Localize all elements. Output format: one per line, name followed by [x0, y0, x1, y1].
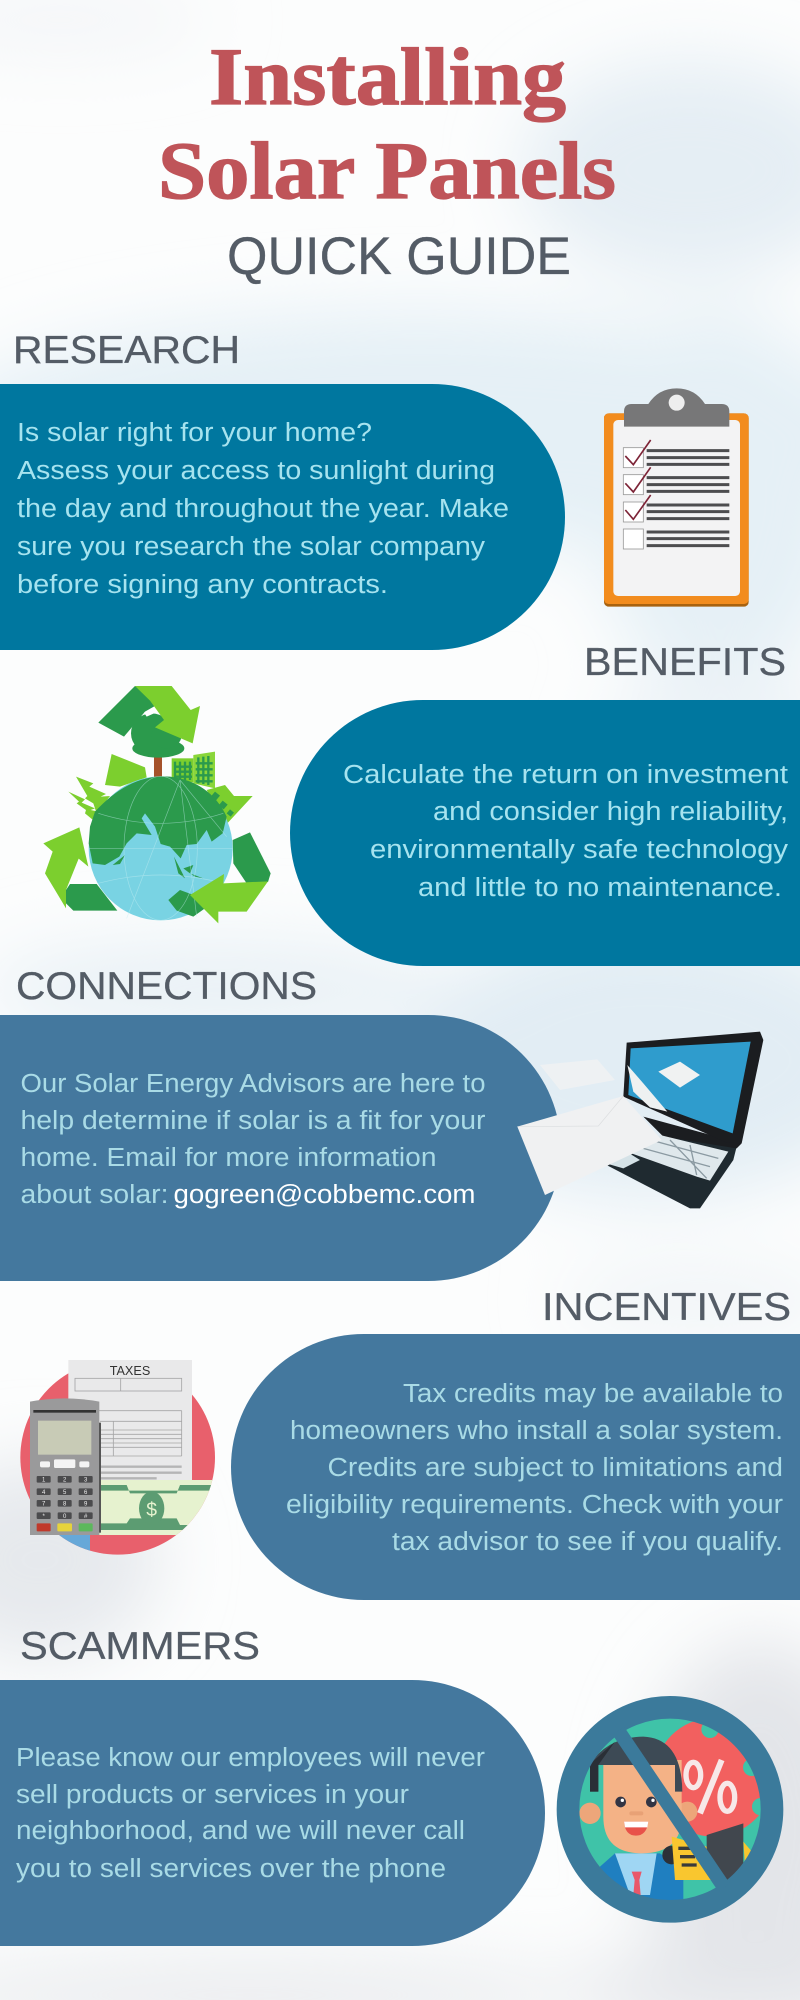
- card reader: 4: [42, 1490, 46, 1496]
- card reader: 0: [63, 1514, 67, 1520]
- tax form: TAXES: [110, 1364, 150, 1378]
- connections text: help determine if solar is a fit for your: [20, 1107, 486, 1135]
- panel: incentives: [231, 1334, 800, 1600]
- card reader: 9: [84, 1502, 88, 1508]
- incentives text: eligibility requirements. Check with your: [286, 1491, 784, 1519]
- card reader: 7: [42, 1502, 46, 1508]
- research text: sure you research the solar company: [17, 533, 485, 561]
- card reader: #: [84, 1514, 88, 1520]
- scammers text: [16, 1744, 486, 1883]
- heading: incentives: INCENTIVES: [542, 1286, 791, 1329]
- scammers text: sell products or services in your: [16, 1781, 410, 1809]
- benefits text: and consider high reliability,: [433, 798, 788, 826]
- heading: connections: CONNECTIONS: [16, 965, 317, 1008]
- prohibition ring and slash: [568, 1707, 772, 1911]
- benefits text: environmentally safe technology: [370, 836, 788, 864]
- top recycling arrow, light half: [135, 686, 200, 743]
- title: Solar Panels: [158, 125, 616, 216]
- card reader: 8: [63, 1502, 67, 1508]
- laptop: [600, 1032, 763, 1208]
- panel: connections: [0, 1015, 561, 1281]
- large envelope: [517, 1096, 662, 1195]
- research text: the day and throughout the year. Make: [17, 495, 509, 523]
- icon: recycling globe: [43, 686, 271, 923]
- incentives text: [286, 1380, 784, 1556]
- incentives text: Tax credits may be available to: [403, 1380, 783, 1408]
- panel: scammers: [0, 1680, 545, 1946]
- banknote: [53, 1480, 212, 1552]
- incentives text: tax advisor to see if you qualify.: [392, 1528, 783, 1556]
- panel: research: [0, 384, 565, 650]
- panel: benefits: [290, 700, 800, 966]
- megaphone: [662, 1823, 753, 1882]
- incentives text: homeowners who install a solar system.: [290, 1417, 783, 1445]
- card reader: [30, 1398, 101, 1535]
- heading: scammers: SCAMMERS: [20, 1625, 260, 1668]
- tax form: [68, 1360, 192, 1482]
- title: [158, 31, 616, 216]
- icon: clipboard checklist: [604, 388, 749, 607]
- card reader: 6: [84, 1490, 88, 1496]
- benefits text: Calculate the return on investment: [343, 761, 788, 789]
- card reader: 3: [84, 1478, 88, 1484]
- benefits text: [343, 761, 788, 902]
- scammers text: neighborhood, and we will never call: [16, 1817, 465, 1845]
- heading: research: RESEARCH: [13, 329, 240, 372]
- small faded envelope: [540, 1059, 615, 1090]
- scammers text: you to sell services over the phone: [16, 1855, 446, 1883]
- research text: Is solar right for your home?: [17, 419, 372, 447]
- incentives text: Credits are subject to limitations and: [328, 1454, 783, 1482]
- card reader: 5: [63, 1490, 67, 1496]
- title: Installing: [209, 31, 566, 122]
- buildings and pines: [68, 752, 253, 824]
- research text: before signing any contracts.: [17, 571, 388, 599]
- research text: Assess your access to sunlight during: [17, 457, 495, 485]
- connections text: [20, 1070, 486, 1209]
- connections text: gogreen@cobbemc.com: [174, 1181, 476, 1209]
- card reader: 2: [63, 1478, 67, 1484]
- red sale badge: [664, 1722, 760, 1836]
- subtitle: QUICK GUIDE: [227, 227, 571, 286]
- salesman: [579, 1737, 697, 1903]
- icon: laptop with envelopes: [517, 1032, 763, 1208]
- connections text: Our Solar Energy Advisors are here to: [20, 1070, 486, 1098]
- tree: [131, 706, 184, 778]
- heading: benefits: BENEFITS: [584, 641, 786, 684]
- globe: [89, 776, 233, 920]
- top recycling arrow, dark half: [98, 686, 157, 737]
- icon: no scammers sign: [568, 1707, 773, 1911]
- right recycling arrow: [190, 832, 271, 923]
- left recycling arrow: [43, 827, 117, 911]
- banknote: $: [146, 1500, 157, 1521]
- card reader: *: [42, 1514, 45, 1520]
- benefits text: and little to no maintenance.: [418, 874, 782, 902]
- research text: [17, 419, 509, 599]
- card reader: 1: [42, 1478, 46, 1484]
- icon: taxes, card reader and money: [20, 1360, 215, 1555]
- connections text: about solar:: [20, 1181, 168, 1209]
- scammers text: Please know our employees will never: [16, 1744, 486, 1772]
- connections text: home. Email for more information: [20, 1144, 436, 1172]
